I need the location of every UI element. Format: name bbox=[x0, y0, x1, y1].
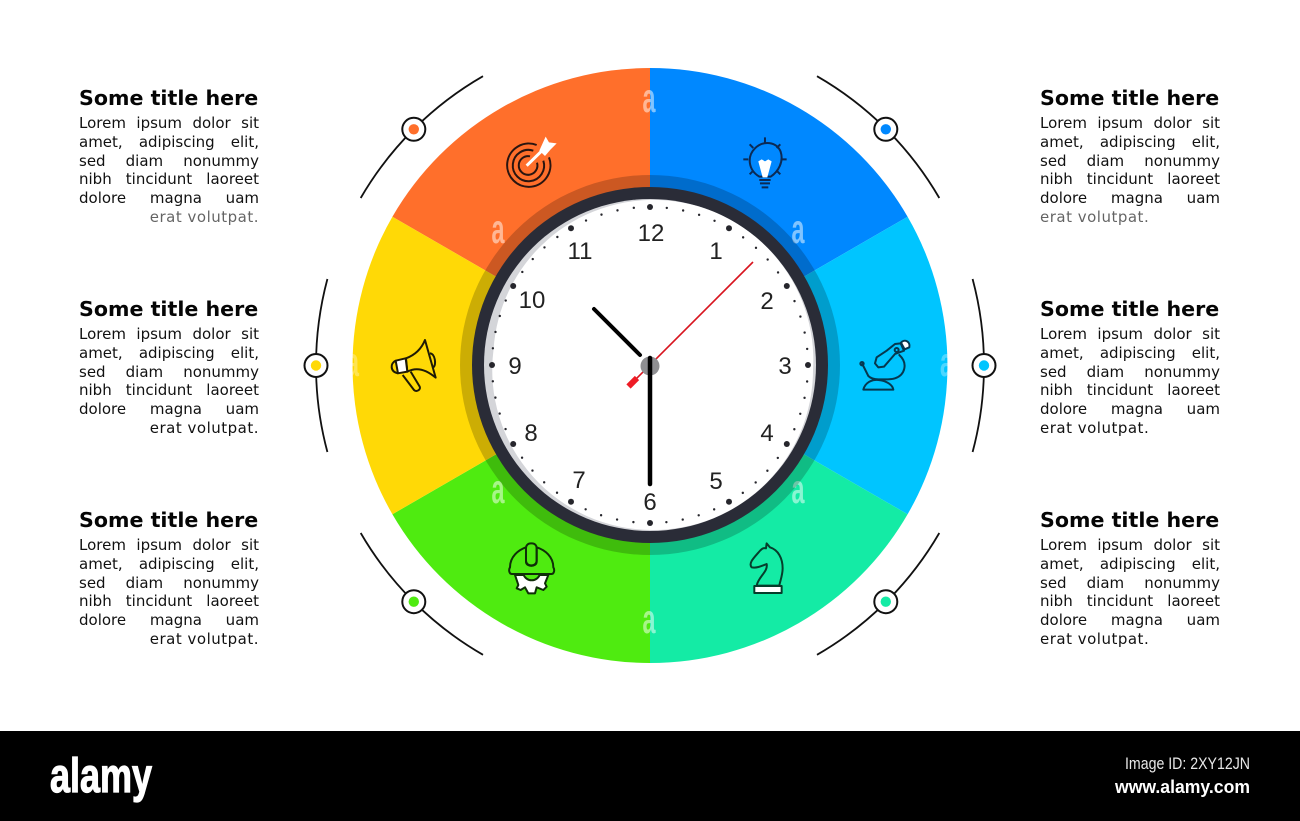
minute hand bbox=[648, 358, 652, 484]
body text: dolore magna uam bbox=[1040, 189, 1220, 207]
watermark letters: a bbox=[642, 596, 656, 642]
segment: green bbox=[392, 366, 650, 663]
footer logo: alamy bbox=[50, 750, 152, 803]
clock numerals: 3 bbox=[778, 353, 792, 380]
connector arc: bottom left bbox=[361, 533, 483, 655]
body text: nibh tincidunt laoreet bbox=[1040, 381, 1220, 399]
body text: sed diam nonummy bbox=[1040, 152, 1220, 170]
icon: target with arrow bbox=[507, 137, 557, 187]
body text: erat volutpat. bbox=[1040, 419, 1149, 437]
text block: middle right bbox=[1040, 297, 1220, 437]
marker: green bbox=[402, 590, 425, 613]
icon: microscope bbox=[860, 341, 910, 390]
text block: bottom right bbox=[1040, 508, 1220, 648]
second hand bbox=[628, 262, 753, 386]
clock numerals: 12 bbox=[638, 220, 664, 247]
body text: erat volutpat. bbox=[150, 419, 259, 437]
body text: sed diam nonummy bbox=[79, 363, 259, 381]
body text bbox=[1040, 114, 1220, 226]
marker: yellow bbox=[304, 354, 328, 377]
clock numerals: 5 bbox=[709, 468, 723, 495]
segment: orange bbox=[392, 68, 650, 366]
body text: amet, adipiscing elit, bbox=[79, 133, 259, 151]
body text: nibh tincidunt laoreet bbox=[79, 592, 259, 610]
clock numerals: 8 bbox=[524, 420, 538, 447]
body text: amet, adipiscing elit, bbox=[1040, 133, 1220, 151]
connector arc: middle left bbox=[304, 279, 328, 452]
ring of six coloured segments bbox=[353, 68, 947, 663]
heading: Some title here bbox=[1040, 508, 1219, 532]
body text: amet, adipiscing elit, bbox=[1040, 344, 1220, 362]
watermark letters bbox=[346, 75, 954, 642]
text block: bottom left bbox=[79, 508, 259, 648]
connector arc: middle right bbox=[972, 279, 996, 452]
body text: dolore magna uam bbox=[79, 611, 259, 629]
heading: Some title here bbox=[1040, 297, 1219, 321]
body text: nibh tincidunt laoreet bbox=[79, 381, 259, 399]
clock grey bezel bbox=[484, 199, 816, 531]
connector arc: bottom right bbox=[817, 533, 939, 655]
clock numerals bbox=[508, 220, 792, 516]
hour hand bbox=[594, 309, 640, 355]
connector arc: top left bbox=[361, 76, 483, 198]
clock centre cap bbox=[640, 356, 660, 376]
body text: Lorem ipsum dolor sit bbox=[1040, 536, 1220, 554]
clock numerals: 10 bbox=[519, 287, 545, 314]
body text bbox=[1040, 325, 1220, 437]
body text: Lorem ipsum dolor sit bbox=[1040, 114, 1220, 132]
clock shadow halo bbox=[460, 175, 840, 555]
heading: Some title here bbox=[79, 508, 258, 532]
marker: orange bbox=[402, 118, 425, 141]
clock bbox=[460, 175, 840, 555]
watermark letters: a bbox=[492, 466, 505, 512]
body text: sed diam nonummy bbox=[1040, 574, 1220, 592]
body text: nibh tincidunt laoreet bbox=[1040, 592, 1220, 610]
segment: blue bbox=[650, 68, 908, 366]
clock white face bbox=[492, 200, 813, 530]
body text: amet, adipiscing elit, bbox=[1040, 555, 1220, 573]
body text: dolore magna uam bbox=[79, 400, 259, 418]
marker: cyan bbox=[972, 354, 996, 377]
body text: Lorem ipsum dolor sit bbox=[79, 325, 259, 343]
body text: Lorem ipsum dolor sit bbox=[79, 114, 259, 132]
segment: cyan bbox=[650, 217, 947, 514]
body text: nibh tincidunt laoreet bbox=[79, 170, 259, 188]
footer website: www.alamy.com bbox=[1114, 777, 1250, 797]
heading: Some title here bbox=[1040, 86, 1219, 110]
body text: amet, adipiscing elit, bbox=[79, 555, 259, 573]
body text bbox=[79, 325, 259, 437]
marker: blue bbox=[874, 118, 897, 141]
heading: Some title here bbox=[79, 297, 258, 321]
text block: middle left bbox=[79, 297, 259, 437]
body text: nibh tincidunt laoreet bbox=[1040, 170, 1220, 188]
clock numerals: 7 bbox=[572, 467, 586, 494]
body text: dolore magna uam bbox=[79, 189, 259, 207]
minute ticks bbox=[492, 207, 808, 523]
clock numerals: 2 bbox=[760, 288, 774, 315]
clock numerals: 11 bbox=[568, 238, 592, 265]
icon: megaphone bbox=[392, 340, 436, 391]
segment: teal bbox=[650, 366, 908, 663]
body text: sed diam nonummy bbox=[79, 574, 259, 592]
icon: helmet with gear bbox=[509, 543, 554, 593]
watermark letters: a bbox=[346, 339, 360, 385]
watermark letters: a bbox=[492, 206, 505, 252]
clock numerals: 6 bbox=[643, 489, 657, 516]
heading: Some title here bbox=[79, 86, 258, 110]
footer bar bbox=[0, 731, 1300, 821]
clock numerals: 4 bbox=[760, 420, 774, 447]
watermark letters: a bbox=[792, 466, 805, 512]
clock numerals: 9 bbox=[508, 353, 522, 380]
body text bbox=[1040, 536, 1220, 648]
body text: erat volutpat. bbox=[150, 208, 259, 226]
body text: erat volutpat. bbox=[1040, 630, 1149, 648]
connector arc: top right bbox=[817, 76, 939, 198]
footer image id: Image ID: 2XY12JN bbox=[1125, 754, 1250, 773]
body text bbox=[79, 114, 259, 226]
marker: teal bbox=[874, 590, 897, 613]
body text: dolore magna uam bbox=[1040, 611, 1220, 629]
watermark letters: a bbox=[792, 206, 805, 252]
body text: erat volutpat. bbox=[1040, 208, 1149, 226]
body text bbox=[79, 536, 259, 648]
body text: Lorem ipsum dolor sit bbox=[1040, 325, 1220, 343]
body text: Lorem ipsum dolor sit bbox=[79, 536, 259, 554]
body text: sed diam nonummy bbox=[1040, 363, 1220, 381]
clock numerals: 1 bbox=[709, 238, 723, 265]
text block: top left bbox=[79, 86, 259, 226]
body text: amet, adipiscing elit, bbox=[79, 344, 259, 362]
watermark letters: a bbox=[940, 339, 954, 385]
clock dark frame bbox=[472, 187, 828, 543]
segment: yellow bbox=[353, 217, 650, 514]
body text: erat volutpat. bbox=[150, 630, 259, 648]
body text: sed diam nonummy bbox=[79, 152, 259, 170]
icon: chess knight bbox=[751, 543, 783, 593]
icon: light bulb bbox=[743, 137, 787, 187]
text block: top right bbox=[1040, 86, 1220, 226]
watermark letters: a bbox=[642, 75, 656, 121]
body text: dolore magna uam bbox=[1040, 400, 1220, 418]
hour dots bbox=[489, 204, 811, 526]
